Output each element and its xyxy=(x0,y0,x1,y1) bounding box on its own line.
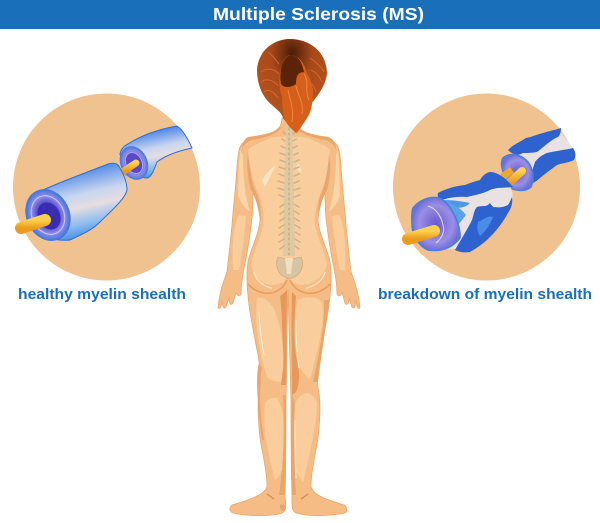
label: breakdown of myelin shealth: breakdown of myelin shealth xyxy=(378,286,592,303)
hair strands xyxy=(261,52,324,98)
title: Multiple Sclerosis (MS) xyxy=(213,4,424,24)
white leg glints xyxy=(259,312,299,478)
shoulder blade highlights xyxy=(262,163,301,187)
thigh highlights xyxy=(256,297,283,382)
calf highlights xyxy=(264,398,283,480)
torso light area xyxy=(248,136,330,285)
hair root shadow xyxy=(280,55,304,87)
panel: healthy myelin sheath xyxy=(13,94,200,280)
icon: healthy distal nerve segment xyxy=(115,126,192,184)
sacrum xyxy=(277,257,303,279)
body silhouette xyxy=(218,118,360,516)
leg inner shading xyxy=(280,290,299,395)
buttocks highlights xyxy=(254,272,325,288)
icon: healthy proximal nerve segment xyxy=(18,163,127,247)
hair back xyxy=(257,39,327,133)
hair xyxy=(257,39,327,133)
circle background right xyxy=(393,94,580,280)
ponytail xyxy=(279,55,313,133)
back muscle shading xyxy=(247,154,330,222)
buttocks crease xyxy=(248,280,330,293)
spine xyxy=(278,128,300,256)
circle background left xyxy=(13,94,200,280)
sacrum centre xyxy=(285,258,293,274)
human figure, back view xyxy=(218,39,360,516)
label: healthy myelin shealth: healthy myelin shealth xyxy=(18,286,186,303)
ponytail strands xyxy=(288,74,309,122)
icon: damaged distal nerve segment xyxy=(502,128,575,190)
panel: breakdown of myelin sheath xyxy=(393,94,580,280)
shoulder shading xyxy=(242,127,336,150)
icon: damaged proximal nerve segment xyxy=(408,170,513,252)
foot details xyxy=(267,494,308,499)
title bar xyxy=(0,0,600,29)
arm highlights xyxy=(238,150,340,211)
